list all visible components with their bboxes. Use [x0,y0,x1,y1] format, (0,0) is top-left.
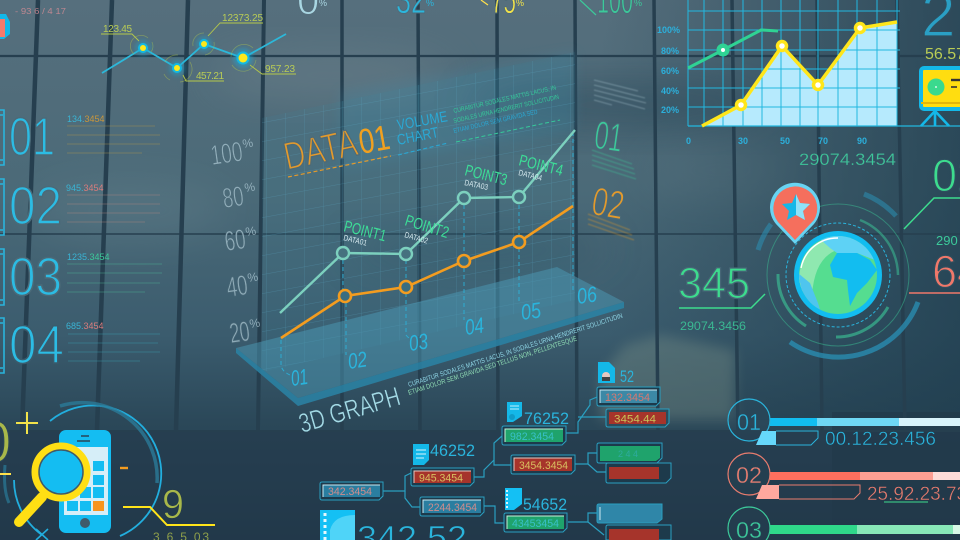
chart subtitle: volume chart [396,108,449,155]
chart axis labels 01-06: 01 [289,364,310,391]
icon: document 46252 [413,444,429,465]
chart y-axis percent labels: 20 [228,315,252,349]
tree node: red lower [606,525,671,540]
tree node: red 3454: 3454.44 [614,414,656,426]
tree node: 2244.3454: 2244.3454 [428,502,477,514]
icon: document with avatar [598,362,615,383]
chart axis labels 01-06: 06 [575,281,599,309]
panel: 3D chart back grid [262,52,575,372]
top-left line chart with callouts: 957.23 [265,64,295,75]
top-right area chart: 60% [661,66,679,76]
timer row 03 [728,507,960,540]
chart title: DATA01: DATA [280,121,361,179]
tree node: green blank [597,443,662,463]
top-left line chart with callouts: 12373.25 [222,13,263,24]
chart y-axis percent labels: 40 [225,269,250,303]
left list: numbered items: 685.3454 [66,321,104,331]
3D GRAPH title and caption [295,313,624,439]
top-right area chart: 0 [686,136,691,146]
top-right area chart: 80% [661,46,679,56]
point labels: POINT2 [403,213,451,242]
tree titles: 46252 [430,441,475,460]
side legend: paragraph, 01, 02: 02 [588,180,628,228]
chart description text: ETIAM DOLOR SEM GRAVIDA SED [453,109,538,135]
readout: 345: 29074.3456 [680,319,746,333]
timer row 02 [728,453,960,505]
chart title: DATA01: 01 [356,118,393,162]
icon: document 54652 [505,488,522,510]
chart description text: SODALES URNA HENDRERIT SOLLICITUDIN [453,94,560,125]
tree node: 982.3454: 982.3454 [510,431,554,443]
chart y-axis percent labels: % [248,316,261,331]
timer row 01: 01 [737,409,761,435]
chart y-axis percent labels: 100 [209,136,245,171]
tree node: 342.3454 [320,482,383,500]
top-right area chart: 40% [661,86,679,96]
icon: document 76252 [507,402,522,422]
tree node: 43453454: 43453454 [512,518,559,530]
chart y-axis percent labels: 60 [223,223,248,257]
top-left line chart with callouts: 123.45 [103,24,132,35]
tree node: 132.3454 [597,387,660,406]
top-left status readout: - 93 6 / 4 17 [15,7,67,16]
top-right area chart: 100% [657,25,680,35]
chart y-axis percent labels: % [241,136,254,151]
top-right readouts [799,0,960,169]
left list: numbered items: 134.3454 [67,114,105,124]
tree node: 3454.3454 [511,455,575,474]
top-right area chart: 50 [780,136,790,146]
point labels: DATA03 [464,178,489,192]
chart description text: CURABITUR SODALES MATTIS LACUS, IN [453,84,557,115]
chart y-axis percent labels: % [246,270,259,285]
tree titles: 52 [620,367,634,386]
left list: numbered items [0,107,162,375]
tree node: 342.3454: 342.3454 [328,486,372,498]
series line: orange [281,206,573,338]
tree node: 43453454 [504,513,567,532]
3D GRAPH title and caption: ETIAM DOLOR SEM GRAVIDA SED TELLUS NON, PELLENTESQUE [407,335,578,397]
point labels: POINT4 [517,152,565,180]
point labels: DATA04 [518,168,543,183]
chart axis labels 01-06: 05 [519,297,543,325]
icon: large document [320,510,355,540]
timer row 02: 02 [736,462,762,488]
chart description text [453,84,560,142]
chart y-axis percent labels: % [244,224,257,239]
chart subtitle: volume chart: CHART [396,124,440,149]
tree node: blue blank [597,504,662,523]
chart axis labels 01-06: 04 [463,313,486,340]
readout: 345: 345 [678,259,750,308]
tree node: 982.3454 [502,426,566,445]
left list: numbered items: 1235.3454 [67,252,110,262]
top-right area chart: 70 [818,136,828,146]
bottom-left search icon group [0,403,161,540]
3D GRAPH title and caption: 3D GRAPH [295,381,404,439]
top-right area chart [657,0,960,146]
readout: 345 [678,259,765,333]
icon: billboard [921,68,960,126]
top-left line chart with callouts: 457.21 [196,71,224,82]
side legend: paragraph, 01, 02: 01 [592,113,626,161]
chart floor slab [236,267,624,406]
point labels: POINT3 [463,162,509,189]
chart axis labels 01-06 [289,281,599,391]
readout: 9 with leader line: 9 [162,481,184,527]
tree node: red 3454 [606,409,669,427]
top percent row [297,0,642,23]
chart subtitle: volume chart: VOLUME [396,108,449,134]
top-left status readout [0,7,67,39]
icon: map pin with star [770,183,820,244]
chart axis labels 01-06: 02 [346,347,369,374]
left list: numbered items: 03 [9,247,62,307]
timer row 01 [728,399,960,450]
chart y-axis percent labels: % [243,180,256,195]
top-right area chart: 90 [857,136,867,146]
side legend: paragraph, 01, 02 [588,80,646,240]
top-right area chart: 20% [661,105,679,115]
top-left line chart with callouts [101,13,296,82]
left list: numbered items: 01 [9,107,55,167]
readout: 9 with leader line [123,481,215,540]
tree titles: 54652 [523,495,567,514]
timer row 01: 00.12.23.456 [825,429,936,450]
point labels [342,152,565,248]
point labels: POINT1 [342,218,388,245]
point labels: DATA02 [403,230,429,246]
series line: teal [280,130,575,313]
data tree connectors [383,397,606,535]
tree node: 945.3454: 945.3454 [419,472,463,484]
top-right readouts: 29074.3454 [799,150,896,169]
right readouts: 02, 290, 64: 290 [936,233,958,248]
tree titles: 76252 [524,409,569,428]
tree titles [357,367,634,540]
tree node: 2244.3454 [420,497,484,516]
tree node: 132.3454: 132.3454 [605,392,650,404]
left list: numbered items: 02 [9,176,62,236]
tree node: green blank: 2 4 4 [618,449,638,459]
globe with rings [758,194,918,357]
chart y-axis percent labels [209,136,261,349]
left list: numbered items: 945.3454 [66,183,104,193]
3D GRAPH title and caption: CURABITUR SODALES MATTIS LACUS, IN SODALES URNA HENDRERIT SOLLICITUDIN [407,313,624,389]
tree node: 945.3454 [411,468,474,486]
right readouts: 02, 290, 64 [904,150,960,297]
point labels: DATA01 [343,233,368,248]
chart axis labels 01-06: 03 [407,328,430,356]
tree node: red blank [606,463,671,483]
left list: numbered items: 04 [9,315,64,375]
tree node: 3454.3454: 3454.3454 [519,460,568,472]
chart drop lines [281,132,573,375]
top-right area chart: 30 [738,136,748,146]
chart y-axis percent labels: 80 [221,180,246,214]
